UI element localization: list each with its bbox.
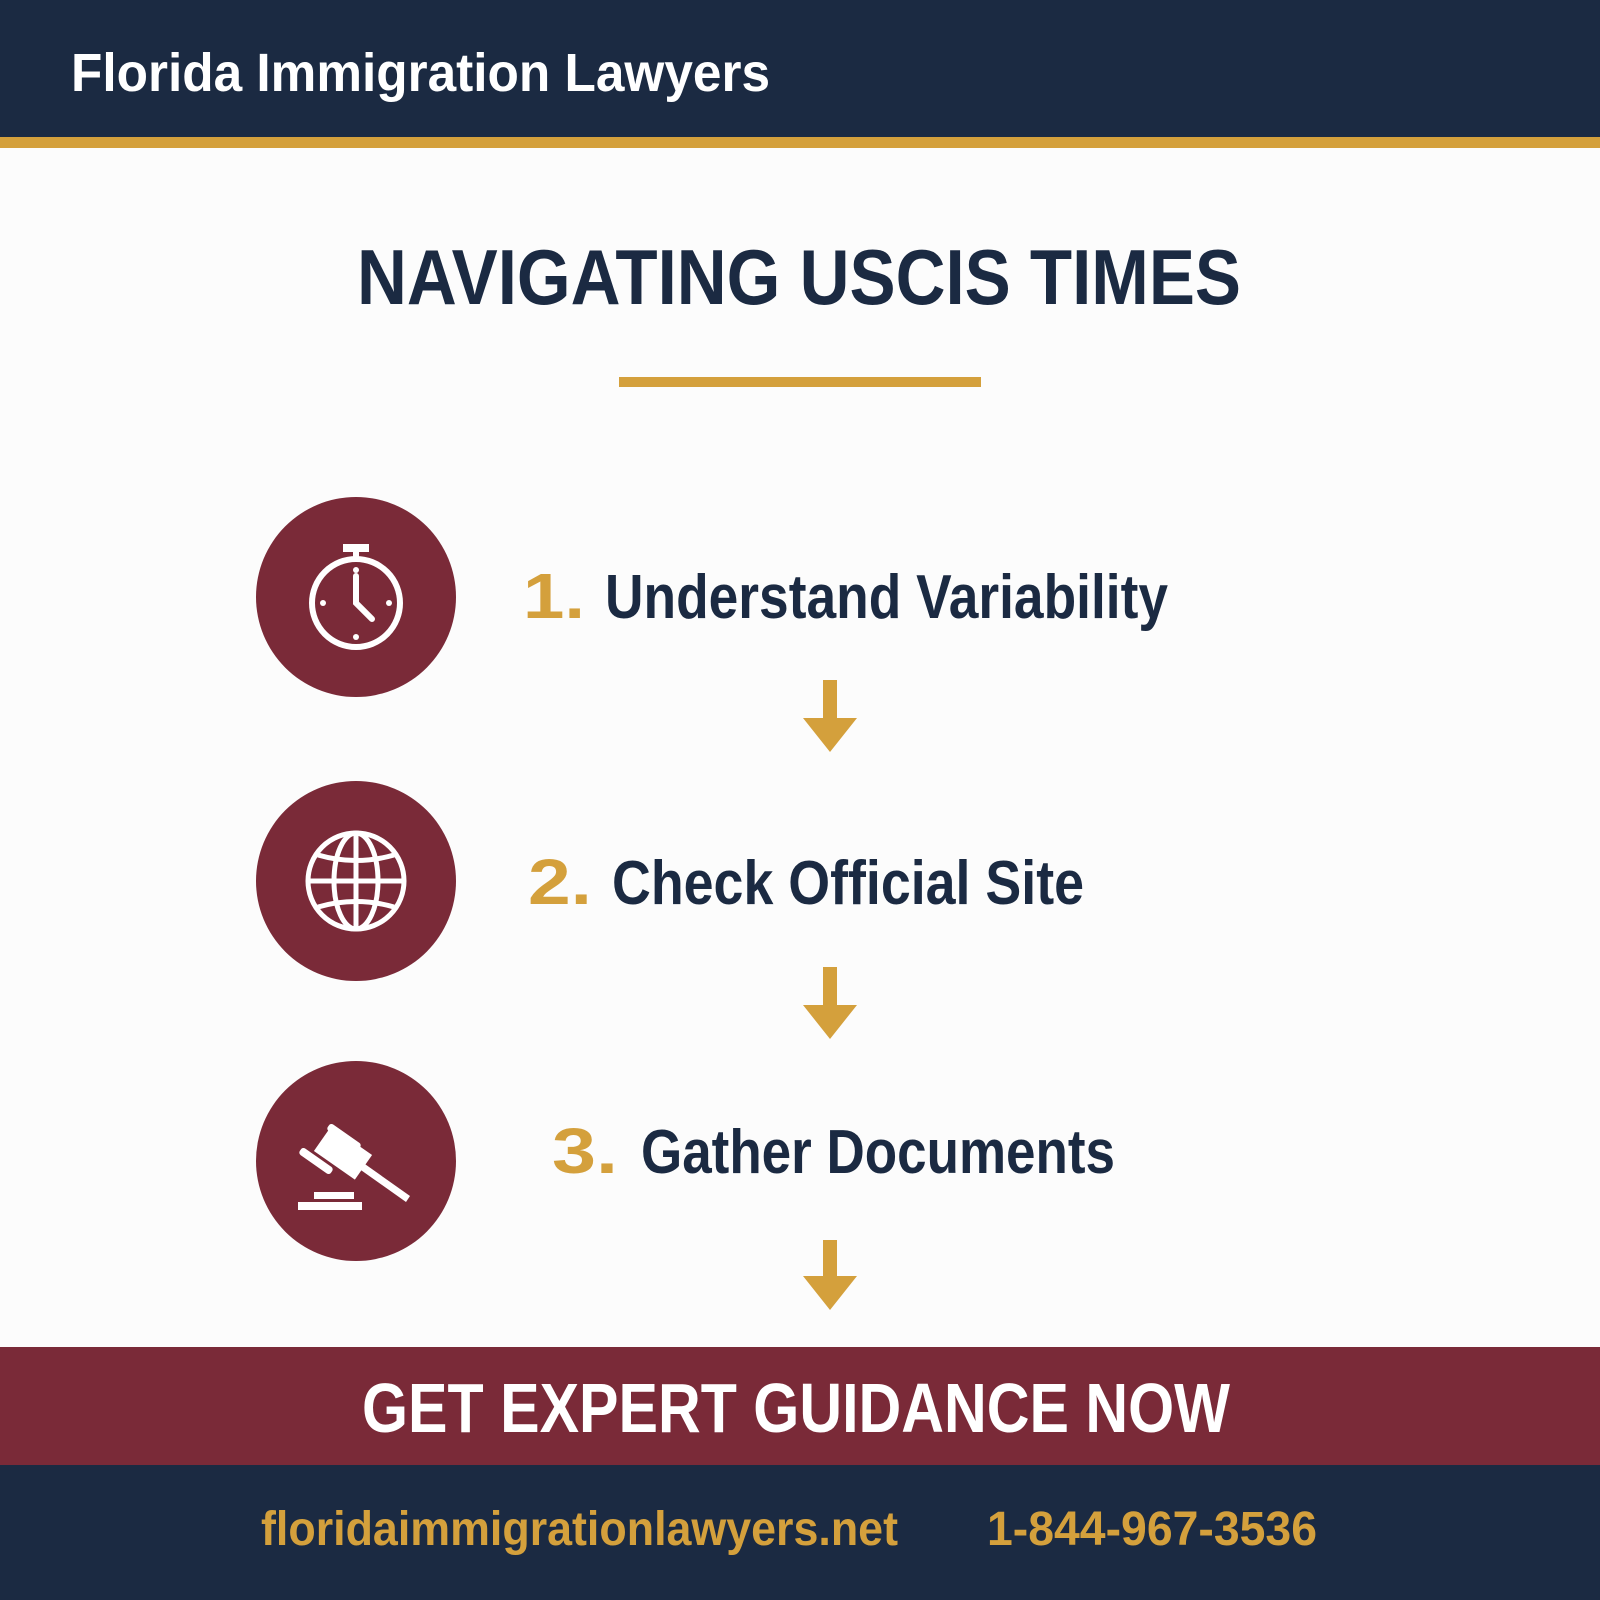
step 3	[256, 1061, 1115, 1261]
step 2	[256, 781, 1084, 981]
step 3 label: 3.	[552, 1115, 618, 1187]
arrow 3	[803, 1240, 857, 1310]
phone: 1-844-967-3536	[987, 1503, 1317, 1556]
icon: stopwatch	[256, 497, 456, 697]
step 1 label: Understand Variability	[605, 563, 1168, 632]
call to action band	[0, 1347, 1600, 1465]
call to action band: GET EXPERT GUIDANCE NOW	[362, 1369, 1230, 1447]
step 1	[256, 497, 1168, 697]
arrow 2	[803, 967, 857, 1039]
title: NAVIGATING USCIS TIMES	[357, 233, 1241, 321]
step 2 label: 2.	[528, 846, 592, 918]
icon: gavel	[256, 1061, 456, 1261]
arrow 1	[803, 680, 857, 752]
header bar	[0, 0, 1600, 148]
header title: Florida Immigration Lawyers	[71, 43, 770, 103]
footer	[0, 1465, 1600, 1600]
step 1 label: 1.	[523, 560, 585, 632]
step 3 label: Gather Documents	[641, 1118, 1115, 1187]
step 2 label: Check Official Site	[612, 849, 1084, 918]
title underline	[619, 377, 981, 387]
icon: globe	[256, 781, 456, 981]
website: floridaimmigrationlawyers.net	[261, 1503, 898, 1556]
